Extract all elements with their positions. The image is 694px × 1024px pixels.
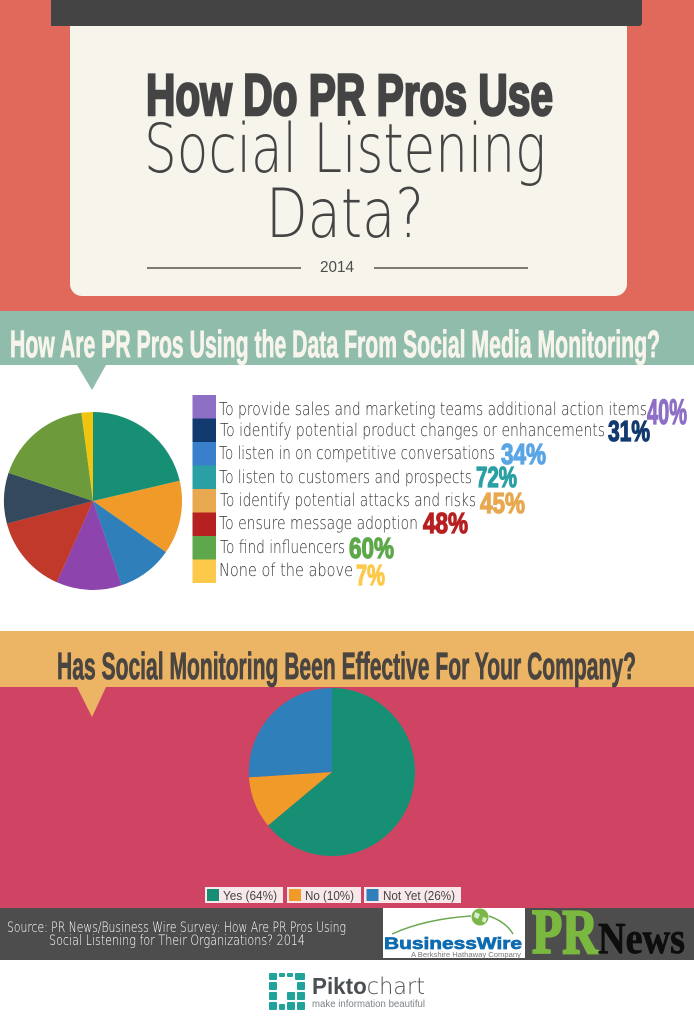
legend labels: To listen to customers and prospects <box>219 467 472 488</box>
logo: Piktochart <box>269 973 425 1010</box>
logo: PR News: PR <box>532 897 599 967</box>
panel: data usage <box>0 311 694 592</box>
heading band <box>0 631 694 717</box>
pie chart: effectiveness <box>249 688 415 856</box>
source text <box>7 920 346 949</box>
year with rules: 2014 <box>320 259 354 276</box>
logo: Business Wire: A Berkshire Hathaway Company <box>411 952 522 959</box>
pie chart: data uses <box>4 412 182 590</box>
icon: Piktochart mark <box>269 973 305 1010</box>
source text: Source: PR News/Business Wire Survey: How Are PR Pros Using <box>7 920 346 936</box>
logo: Business Wire: BusinessWire <box>384 934 522 953</box>
title <box>144 63 553 254</box>
title: Social Listening <box>144 110 546 189</box>
wordmark: Piktochart <box>312 973 425 1000</box>
panel: header <box>0 0 694 311</box>
top dark bar <box>51 0 642 26</box>
heading band <box>0 311 694 390</box>
percentages: 45% <box>480 488 525 520</box>
chart legend: Not Yet (26%) <box>383 888 455 903</box>
chart legend: Yes (64%) <box>223 888 277 903</box>
legend labels: To find influencers <box>220 537 345 558</box>
legend labels: To listen in on competitive conversations <box>219 443 495 464</box>
panel: title card <box>70 20 627 296</box>
legend labels: None of the above <box>219 560 353 581</box>
percentages: 72% <box>476 462 517 494</box>
title: Data? <box>266 175 424 254</box>
panel: effectiveness <box>0 631 694 908</box>
legend labels: To ensure message adoption <box>219 513 418 534</box>
logo: Business Wire <box>383 908 525 959</box>
tagline: make information beautiful <box>312 999 425 1010</box>
chart legend: No (10%) <box>305 888 354 903</box>
logo: PR News <box>532 897 685 967</box>
legend labels <box>219 399 647 581</box>
percentages: 60% <box>349 533 394 565</box>
percentages: 7% <box>356 560 385 592</box>
percentages: 48% <box>423 508 468 540</box>
percentages: 31% <box>608 416 650 448</box>
legend labels: To identify potential attacks and risks <box>220 490 476 511</box>
percentages: 34% <box>501 439 546 471</box>
panel: source footer <box>0 897 694 967</box>
source text: Social Listening for Their Organizations? 2014 <box>49 933 305 949</box>
chart legend <box>205 887 461 903</box>
legend colour swatches <box>192 395 216 583</box>
percentages <box>349 393 687 592</box>
